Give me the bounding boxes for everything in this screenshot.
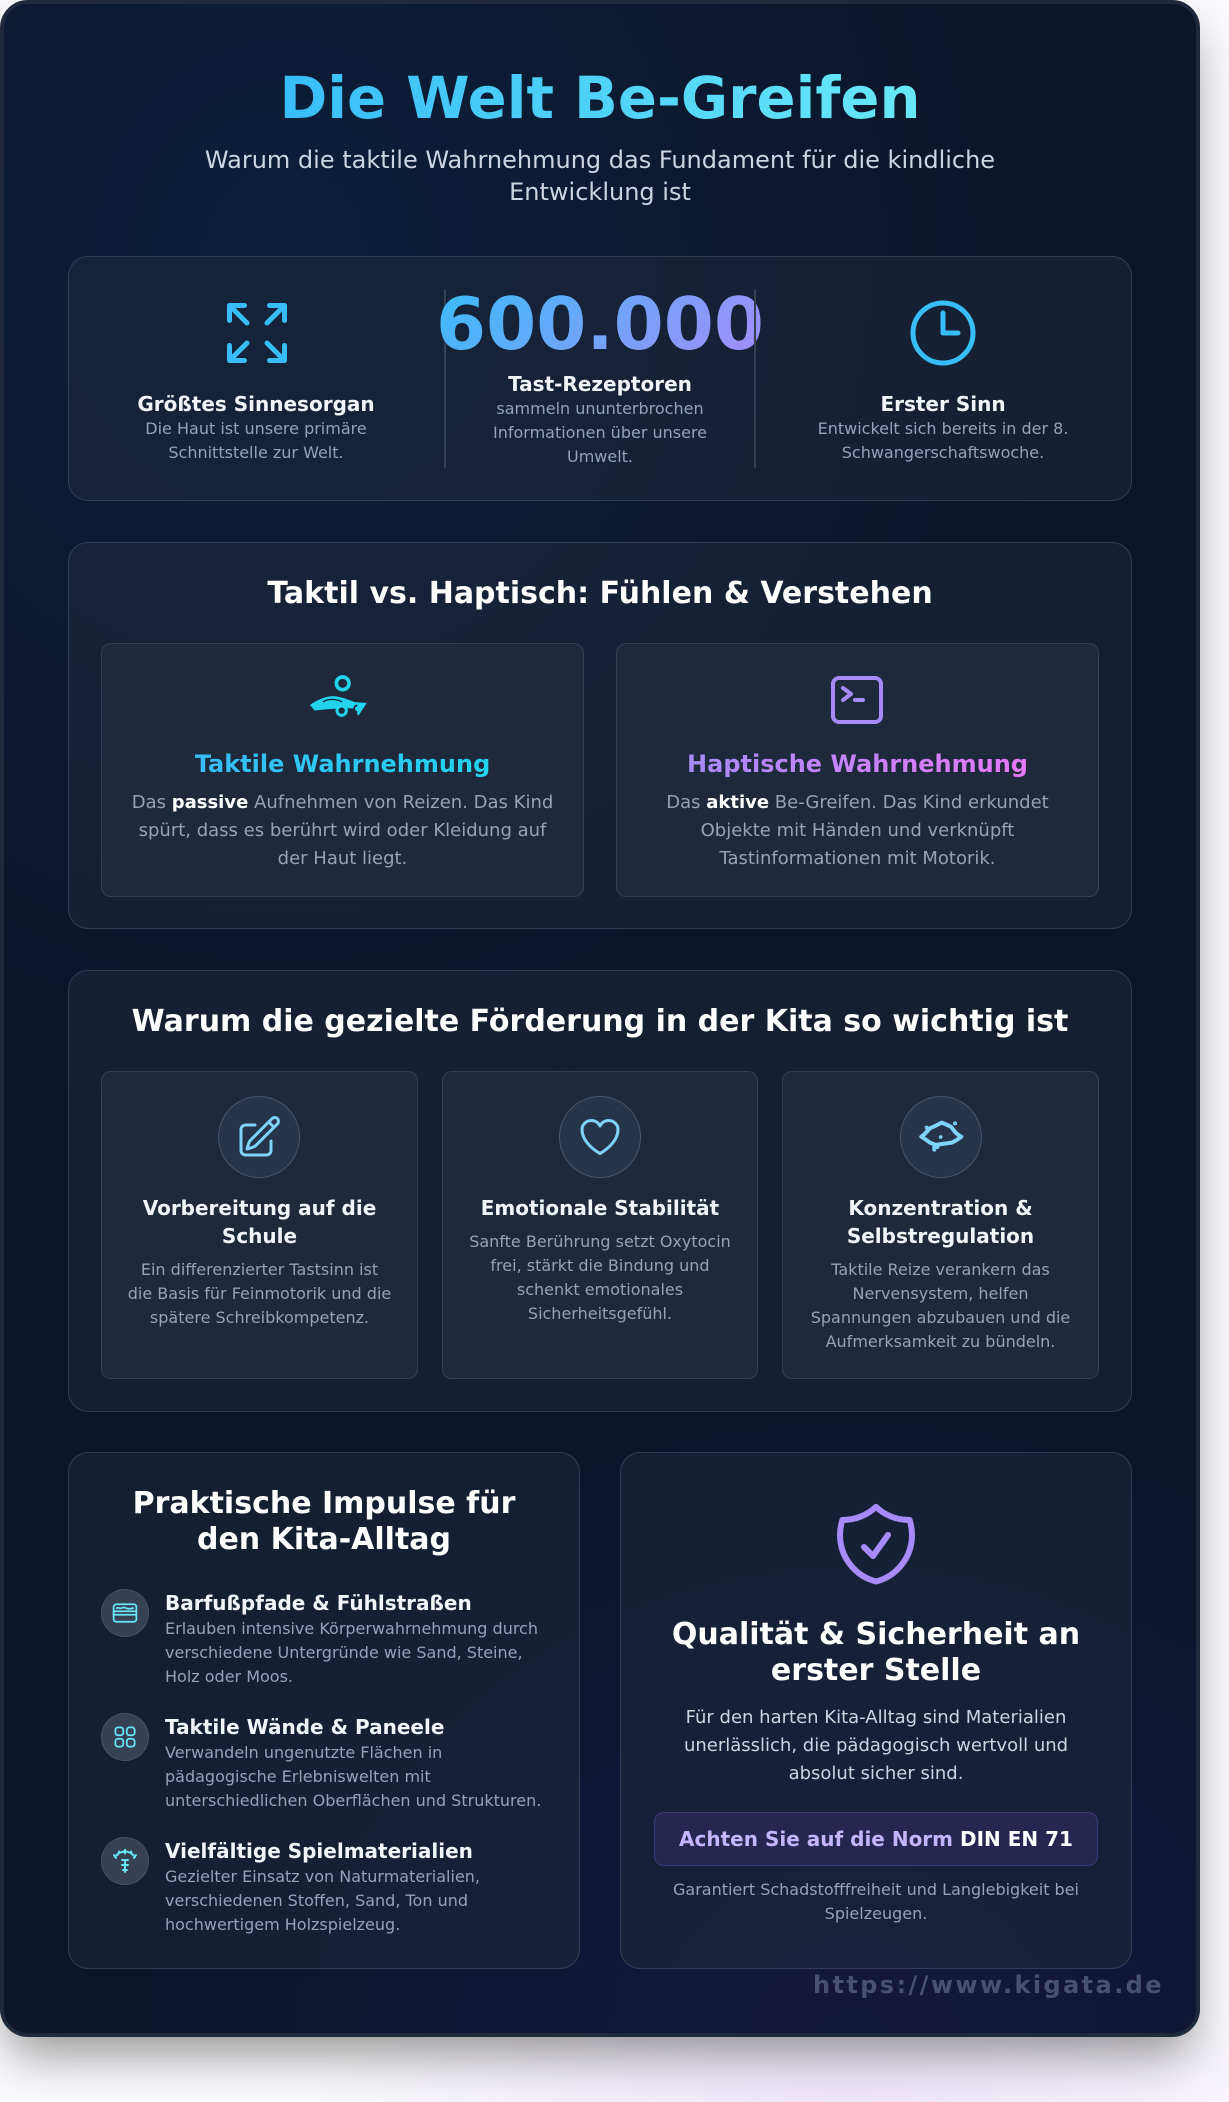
text: frei, stärkt die Bindung und — [490, 1256, 710, 1275]
heading: Emotionale Stabilität — [481, 1196, 719, 1220]
item text — [165, 1867, 480, 1934]
icon: squares — [114, 1726, 136, 1748]
title: Die Welt Be-Greifen — [280, 65, 920, 132]
item: play materials — [101, 1837, 480, 1934]
heading: Selbstregulation — [847, 1224, 1034, 1248]
text: Sicherheitsgefühl. — [528, 1304, 672, 1323]
icon circle: materials — [101, 1837, 149, 1885]
item text: pädagogische Erlebniswelten mit — [165, 1767, 431, 1786]
text: die Basis für Feinmotorik und die — [128, 1284, 391, 1303]
panel: quality and safety — [620, 1452, 1132, 1969]
heading: den Kita-Alltag — [197, 1522, 451, 1556]
text: tactile: Das passive Aufnehmen von Reizen. Das Kind — [132, 792, 553, 812]
fact: receptors: Umwelt. — [567, 446, 633, 466]
heading: Qualität & Sicherheit an — [672, 1616, 1080, 1652]
heading: tactile: Taktile Wahrnehmung — [195, 750, 490, 778]
small note: Spielzeugen. — [825, 1904, 927, 1923]
heading: Taktil vs. Haptisch: Fühlen & Verstehen — [267, 576, 933, 610]
card: emotional stability — [442, 1071, 758, 1379]
item heading: Vielfältige Spielmaterialien — [165, 1839, 473, 1863]
icon: shield check — [837, 1504, 915, 1584]
callout: norm — [654, 1812, 1098, 1866]
panel: tactile vs haptic — [68, 542, 1132, 929]
text: Spannungen abzubauen und die — [811, 1308, 1070, 1327]
fact: largest sense organ: Schnittstelle zur Welt. — [168, 442, 344, 462]
icon circle: heart — [559, 1096, 641, 1178]
icon: heart — [580, 1119, 620, 1155]
heading: haptic: Haptische Wahrnehmung — [687, 750, 1028, 778]
item text: hochwertigem Holzspielzeug. — [165, 1915, 400, 1934]
item text: verschiedene Untergründe wie Sand, Steine, — [165, 1643, 523, 1662]
watermark url: https://www.kigata.de — [813, 1971, 1164, 1999]
heading: Praktische Impulse für — [133, 1486, 515, 1520]
item text: unterschiedlichen Oberflächen und Strukturen. — [165, 1791, 541, 1810]
icon circle: pencil — [218, 1096, 300, 1178]
icon: pencil — [240, 1116, 280, 1156]
text: Für den harten Kita-Alltag sind Materialien — [686, 1707, 1066, 1728]
heading — [133, 1486, 516, 1556]
text — [811, 1260, 1070, 1351]
panel: key facts — [68, 256, 1132, 501]
heading: Vorbereitung auf die — [143, 1196, 376, 1220]
card: haptic — [616, 643, 1099, 897]
item heading: Barfußpfade & Fühlstraßen — [165, 1591, 472, 1615]
item text — [165, 1619, 538, 1686]
text: tactile: der Haut liegt. — [278, 848, 407, 868]
item text: Verwandeln ungenutzte Flächen in — [165, 1743, 442, 1762]
text: haptic: Tastinformationen mit Motorik. — [719, 848, 996, 868]
icon: clock — [910, 300, 976, 366]
fact: largest sense organ: Die Haut ist unsere primäre — [145, 418, 367, 438]
card: concentration — [782, 1071, 1099, 1379]
big number: 600.000 — [436, 282, 764, 366]
icon: terminal — [831, 676, 883, 724]
fact: largest sense organ — [137, 392, 375, 462]
heading: Warum die gezielte Förderung in der Kita so wichtig ist — [132, 1004, 1068, 1038]
text: Sanfte Berührung setzt Oxytocin — [469, 1232, 731, 1251]
text: Taktile Reize verankern das — [831, 1260, 1050, 1279]
item: tactile walls — [101, 1713, 541, 1810]
text: Nervensystem, helfen — [853, 1284, 1028, 1303]
text: Ein differenzierter Tastsinn ist — [141, 1260, 378, 1279]
heading: Schule — [222, 1224, 297, 1248]
small note: Garantiert Schadstofffreiheit und Langlebigkeit bei — [673, 1880, 1079, 1899]
heading: erster Stelle — [771, 1652, 981, 1688]
item text — [165, 1743, 541, 1810]
text: tactile — [132, 792, 553, 868]
fact: first sense: Entwickelt sich bereits in der 8. — [818, 418, 1068, 438]
text: absolut sicher sind. — [789, 1763, 963, 1784]
icon: brain — [919, 1120, 964, 1152]
text: haptic — [666, 792, 1049, 868]
callout: norm: Achten Sie auf die Norm DIN EN 71 — [679, 1827, 1073, 1851]
divider left — [444, 289, 446, 468]
text: tactile: spürt, dass es berührt wird oder Kleidung auf — [139, 820, 546, 840]
heading — [142, 1196, 376, 1248]
item heading: Taktile Wände & Paneele — [165, 1715, 444, 1739]
text: Aufmerksamkeit zu bündeln. — [826, 1332, 1055, 1351]
divider right — [754, 289, 756, 468]
fact: first sense: Schwangerschaftswoche. — [842, 442, 1044, 462]
text: spätere Schreibkompetenz. — [150, 1308, 369, 1327]
item text: Holz oder Moos. — [165, 1667, 293, 1686]
subtitle: Warum die taktile Wahrnehmung das Fundament für die kindliche — [205, 146, 995, 174]
text — [128, 1260, 391, 1327]
text — [684, 1707, 1068, 1784]
text: unerlässlich, die pädagogisch wertvoll und — [684, 1735, 1068, 1756]
text: haptic: Objekte mit Händen und verknüpft — [701, 820, 1014, 840]
fact: receptors — [493, 372, 707, 466]
icon circle: squares — [101, 1713, 149, 1761]
fact: first sense — [818, 392, 1068, 462]
fact: receptors: Informationen über unsere — [493, 422, 707, 442]
icon: expand arrows — [227, 303, 287, 363]
fact: first sense: Erster Sinn — [880, 392, 1006, 416]
panel: practical ideas — [68, 1452, 580, 1969]
item: barefoot paths — [101, 1589, 538, 1686]
subtitle: Entwicklung ist — [509, 178, 691, 206]
icon circle: brain — [900, 1096, 982, 1178]
heading: Konzentration & — [848, 1196, 1033, 1220]
fact: receptors: sammeln ununterbrochen — [496, 398, 704, 418]
small note — [673, 1880, 1079, 1923]
heading — [672, 1616, 1080, 1688]
text: schenkt emotionales — [517, 1280, 683, 1299]
icon: touch — [310, 675, 366, 717]
icon: card — [112, 1603, 138, 1623]
subtitle — [205, 146, 995, 206]
icon: materials — [113, 1849, 137, 1873]
panel: why support matters — [68, 970, 1132, 1412]
item text: Erlauben intensive Körperwahrnehmung durch — [165, 1619, 538, 1638]
card: tactile — [101, 643, 584, 897]
fact: receptors: Tast-Rezeptoren — [508, 372, 692, 396]
text — [469, 1232, 731, 1323]
fact: largest sense organ: Größtes Sinnesorgan — [137, 392, 375, 416]
icon circle: card — [101, 1589, 149, 1637]
item text: Gezielter Einsatz von Naturmaterialien, — [165, 1867, 480, 1886]
text: haptic: Das aktive Be-Greifen. Das Kind erkundet — [666, 792, 1049, 812]
heading — [847, 1196, 1034, 1248]
card: school readiness — [101, 1071, 418, 1379]
item text: verschiedenen Stoffen, Sand, Ton und — [165, 1891, 468, 1910]
